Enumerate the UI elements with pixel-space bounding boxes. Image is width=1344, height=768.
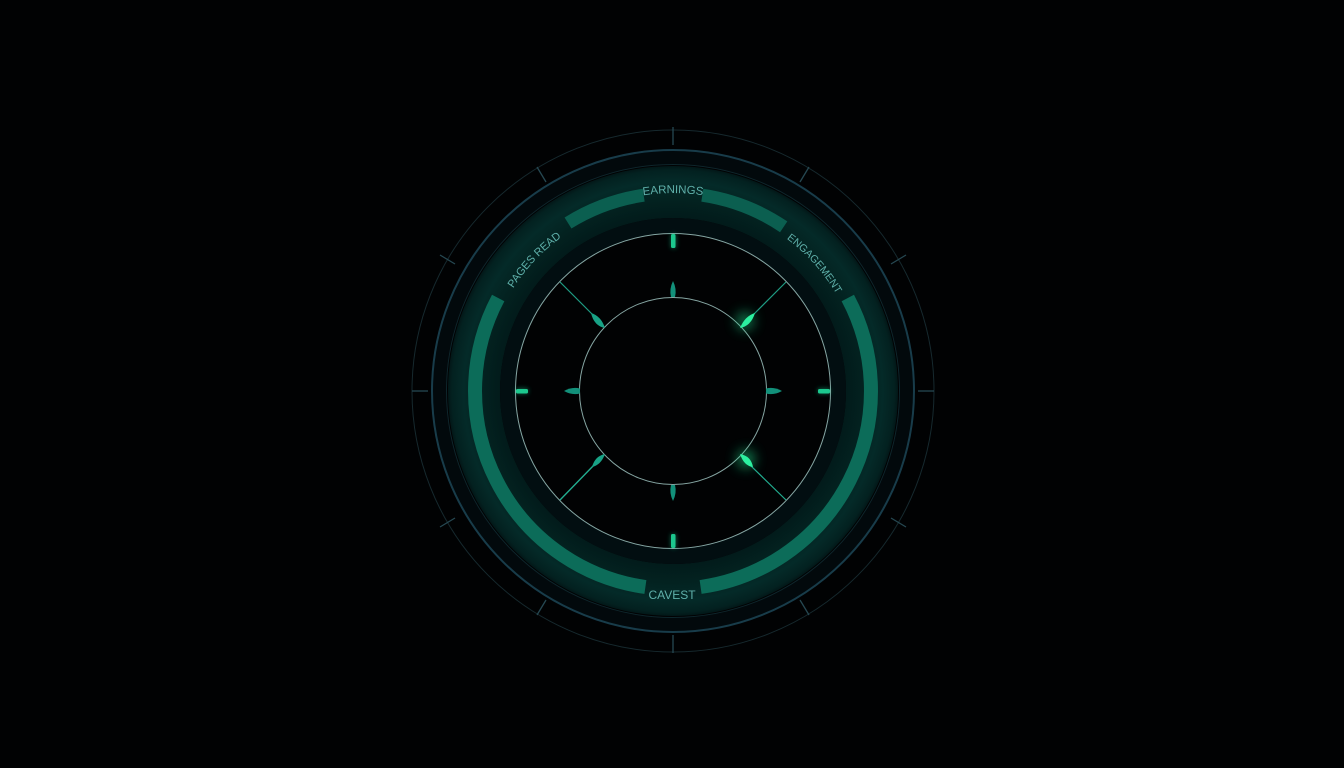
teal track band [446, 164, 900, 618]
bright segment: engagement to caveat [701, 298, 871, 587]
outer markers [516, 234, 830, 548]
bright segment: earnings right [702, 195, 784, 227]
inner circles [516, 234, 830, 548]
label: pages read: PAGES READ [507, 232, 560, 288]
spoke: lower left [560, 454, 605, 500]
spoke: upper left [560, 282, 605, 328]
spoke: upper right, glowing [736, 282, 786, 330]
outer tick ring [412, 127, 934, 653]
spoke: lower right, glowing [737, 450, 786, 500]
bright segment: earnings left [568, 195, 644, 223]
label: cavest: CAVEST [648, 588, 696, 602]
label: earnings: EARNINGS [643, 185, 703, 196]
inner leaf markers [564, 281, 782, 501]
bright segment: pages read to caveat [475, 298, 645, 587]
label: engagement: ENGAGEMENT [787, 234, 842, 292]
